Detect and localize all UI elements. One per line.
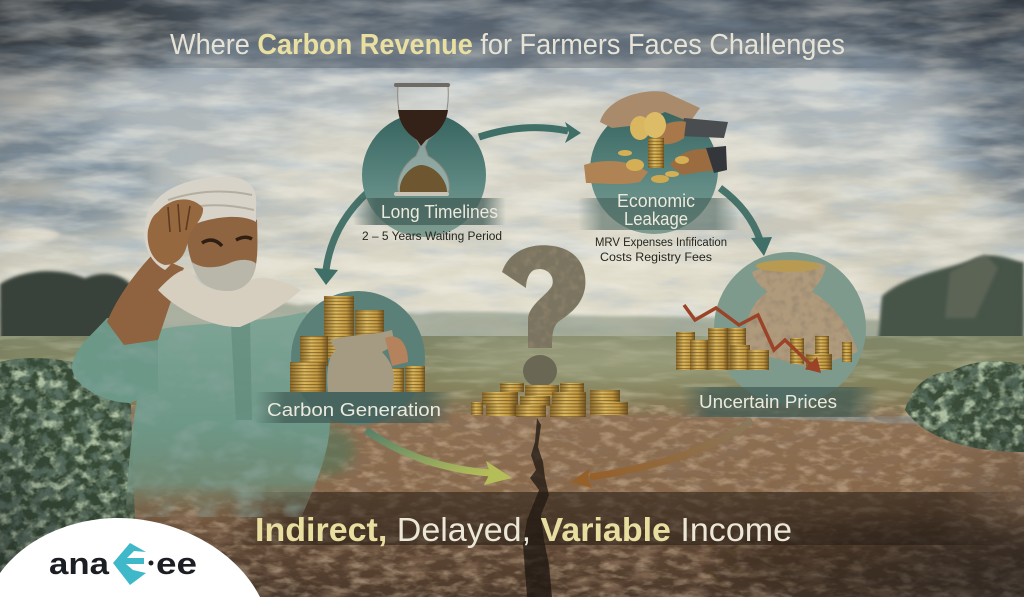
beard [192,260,256,291]
disc [714,252,866,404]
face [187,215,257,288]
farmer figure [70,177,335,520]
sack side [385,337,408,366]
scarf [158,270,301,327]
subtext: Costs Registry Fees [600,252,712,264]
bottom caption band [215,492,1024,545]
sky background [0,0,1024,340]
bottom caption: Indirect, Delayed, Variable Income [255,511,792,548]
subtext: 2 – 5 Years Waiting Period [362,231,502,243]
coin sack [327,330,395,392]
field background [0,336,1024,416]
node: uncertain prices [676,252,880,417]
label: Uncertain Prices [699,391,837,412]
coin stacks [290,296,425,392]
kurta sleeve [72,318,158,403]
arrow: uncertain prices to income [571,420,752,488]
cracked soil ground [131,405,1024,597]
right foliage [905,361,1024,452]
logo mark [113,543,146,585]
arrow: carbon generation to income [366,430,512,485]
logo panel [0,518,260,597]
kurta fabric shading [84,344,328,517]
label band [353,198,506,225]
plants near farmer [295,424,355,476]
label band [680,387,880,417]
label band [578,198,739,230]
node: economic leakage [578,91,739,264]
coin sack [746,260,858,367]
falling price line [684,305,821,373]
logo wordmark left: ana [49,546,110,581]
left foliage [0,350,140,578]
arrow: long timelines to carbon generation [314,192,368,285]
hands exchanging coins [584,91,728,184]
disc [362,113,486,237]
node: long timelines [353,83,506,243]
logo wordmark right: ee [156,546,197,581]
coin pile [471,383,628,417]
logo dot [148,560,154,566]
subtext: MRV Expenses Infification [595,237,727,249]
kurta placket [231,322,252,420]
node: carbon generation [255,291,455,425]
coin columns [676,328,852,370]
disc [291,291,425,425]
central question mark [502,245,586,385]
ground crack [523,418,552,597]
distant tree line [0,254,1024,345]
label band [255,392,455,423]
label: Carbon Generation [267,399,441,420]
forearm [107,255,184,345]
hand on head [148,199,203,265]
arrow: long timelines to economic leakage [479,122,581,143]
arrow: economic leakage to uncertain prices [720,188,772,256]
title: Where Carbon Revenue for Farmers Faces Challenges [170,29,845,61]
turban [144,177,256,270]
label: Economic [617,190,695,211]
disc [590,106,718,234]
hourglass [394,83,450,196]
kurta body [125,312,330,520]
label: Long Timelines [381,201,498,222]
title band [90,0,930,68]
eyes and brow shadow [202,237,252,246]
label: Leakage [624,208,688,229]
